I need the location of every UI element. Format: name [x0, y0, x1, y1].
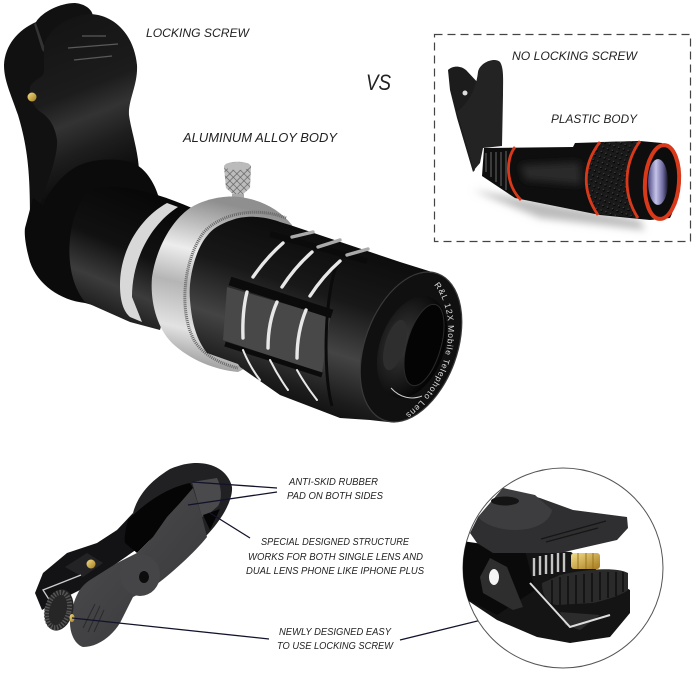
brass pin	[86, 560, 96, 568]
mount plate	[25, 159, 165, 318]
silver band	[120, 203, 178, 322]
white wire	[530, 583, 610, 627]
red rings	[508, 141, 640, 218]
rear ribs	[486, 151, 506, 190]
lower jaw	[455, 550, 630, 643]
upper plate	[470, 488, 628, 553]
text: anti-skid rubber pad: PAD ON BOTH SIDES	[287, 490, 383, 502]
main product: aluminum telephoto lens with clip	[4, 3, 462, 423]
back clip arm	[35, 513, 150, 610]
text: anti-skid rubber pad	[287, 476, 383, 502]
lens front face	[360, 271, 462, 423]
barrel ridges	[225, 234, 367, 406]
black lens barrel	[190, 217, 432, 422]
front plate	[70, 488, 207, 647]
tube	[69, 187, 192, 330]
label: locking screw: LOCKING SCREW	[146, 26, 251, 40]
clip knurled wheel edge	[34, 23, 47, 55]
rear disc	[133, 463, 232, 540]
lower jaw highlight	[560, 612, 600, 630]
hinge lug	[65, 553, 103, 577]
label: no locking screw: NO LOCKING SCREW	[512, 49, 639, 63]
clip back blade	[4, 3, 93, 215]
text: special designed structure	[246, 536, 424, 577]
detail circle: locking screw close-up	[455, 468, 663, 668]
inner recess	[125, 483, 193, 553]
spring	[534, 553, 564, 576]
small lens barrel	[482, 141, 675, 220]
black arm	[463, 542, 534, 614]
lens engraving: R&L 12X Mobile Telephoto Lens	[406, 282, 454, 417]
clip front paddle	[30, 14, 139, 205]
text: newly designed locking screw	[277, 626, 394, 652]
barrel sleeve highlight	[223, 287, 330, 373]
barrel gloss	[520, 162, 582, 185]
dashed frame	[434, 34, 690, 242]
silver focus collar	[152, 197, 300, 372]
paddle grip lines	[68, 36, 118, 60]
small clip	[448, 60, 503, 172]
brass pivot pin	[28, 92, 36, 102]
upper plate boss	[478, 488, 552, 530]
text: newly designed locking screw: NEWLY DESIGNED EASY	[279, 626, 392, 638]
text: newly designed locking screw: TO USE LOCKING SCREW	[277, 640, 394, 652]
text: anti-skid rubber pad: ANTI-SKID RUBBER	[288, 476, 378, 488]
dotted grip section	[587, 141, 640, 218]
plate grip ridges	[83, 604, 104, 632]
barrel white slats	[243, 232, 368, 400]
brass locking pin	[70, 614, 74, 622]
spring wire	[43, 575, 81, 601]
screw boss	[120, 554, 160, 596]
inner pad	[192, 478, 221, 517]
label: VS: VS	[366, 70, 391, 95]
label: aluminum alloy body: ALUMINUM ALLOY BODY	[182, 131, 339, 145]
text: special designed structure: DUAL LENS PHONE LIKE IPHONE PLUS	[246, 565, 424, 577]
text: special designed structure: SPECIAL DESIGNED STRUCTURE	[261, 536, 410, 548]
pivot lug	[480, 558, 523, 610]
bottom clip product	[35, 463, 232, 647]
knurled wheel	[542, 569, 628, 605]
brass post	[571, 553, 600, 569]
plate ridges	[541, 521, 606, 542]
small lens shadow	[473, 190, 645, 230]
knurled wheel	[40, 586, 78, 634]
dark slot	[203, 509, 220, 530]
knurled screw	[224, 162, 251, 206]
panel: comparison lens	[434, 34, 690, 242]
text: special designed structure: WORKS FOR BOTH SINGLE LENS AND	[248, 551, 423, 563]
front lens	[642, 144, 682, 220]
callout lines	[72, 482, 510, 640]
label: plastic body: PLASTIC BODY	[551, 112, 638, 126]
screw hole	[139, 571, 149, 583]
